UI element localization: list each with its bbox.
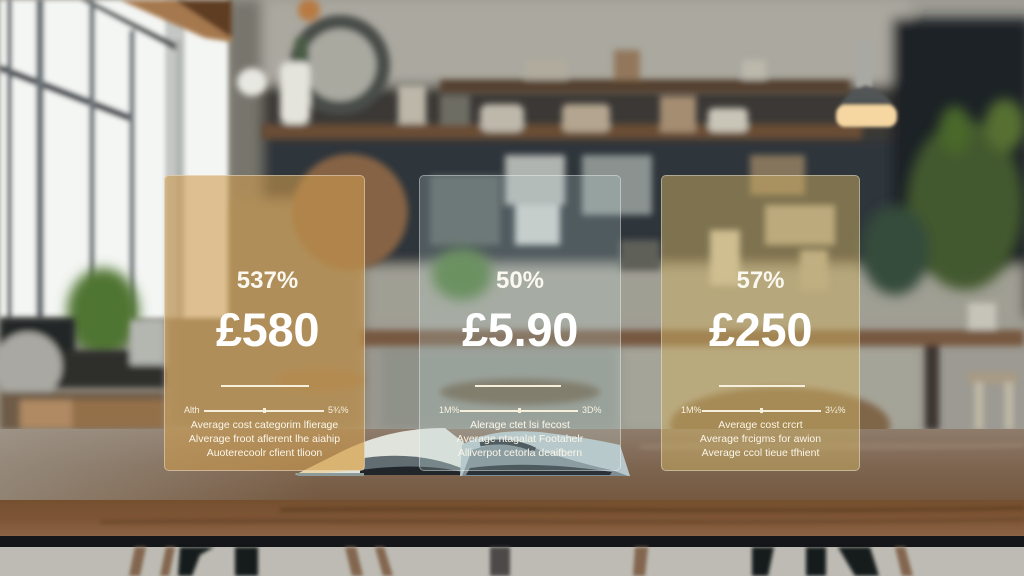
panel: middle card bbox=[419, 175, 621, 471]
middle description: Average ntagalat Footahelr bbox=[457, 433, 583, 445]
left divider bbox=[221, 385, 309, 387]
left description: Auoterecoolr cfient tlioon bbox=[207, 447, 322, 459]
right range scale: 3¼% bbox=[825, 405, 846, 415]
middle percentage: 50% bbox=[496, 267, 544, 294]
middle range scale bbox=[439, 405, 602, 415]
left range scale bbox=[184, 405, 349, 415]
ceiling beam bbox=[120, 0, 232, 42]
left description bbox=[188, 419, 340, 459]
right percentage: 57% bbox=[736, 267, 785, 294]
middle description bbox=[456, 419, 584, 459]
icon: open book bbox=[295, 428, 630, 476]
decor bbox=[237, 0, 862, 290]
panel: right card bbox=[661, 175, 860, 471]
wooden table bbox=[0, 429, 1024, 547]
middle description: Alliverpot cetorla deaifbern bbox=[458, 447, 582, 459]
middle description: Alerage ctet lsi fecost bbox=[470, 419, 570, 431]
middle divider bbox=[475, 385, 561, 387]
middle range scale: 3D% bbox=[582, 405, 602, 415]
left description: Average cost categorim lfierage bbox=[191, 419, 338, 431]
left range scale: Alth bbox=[184, 405, 200, 415]
right description: Average ccol tieue tfhient bbox=[702, 447, 819, 459]
middle price: £5.90 bbox=[462, 303, 578, 356]
pendant lamp bbox=[836, 42, 897, 127]
right price: £250 bbox=[709, 303, 812, 356]
right range scale: 1M% bbox=[681, 405, 702, 415]
right divider bbox=[719, 385, 805, 387]
windows bbox=[0, 0, 228, 318]
right description bbox=[700, 419, 821, 459]
right description: Average frcigms for awion bbox=[700, 433, 821, 445]
left percentage: 537% bbox=[237, 267, 298, 294]
middle range scale: 1M% bbox=[439, 405, 460, 415]
right description: Average cost crcrt bbox=[718, 419, 803, 431]
right range scale bbox=[681, 405, 846, 415]
panel: left card bbox=[164, 175, 365, 471]
left range scale: 5¾% bbox=[328, 405, 349, 415]
counter and furniture bbox=[0, 303, 1024, 463]
floor and table legs bbox=[0, 547, 1024, 576]
left description: Alverage froot aflerent lhe aiahip bbox=[189, 433, 340, 445]
left price: £580 bbox=[216, 303, 319, 356]
plants bbox=[67, 99, 1024, 356]
